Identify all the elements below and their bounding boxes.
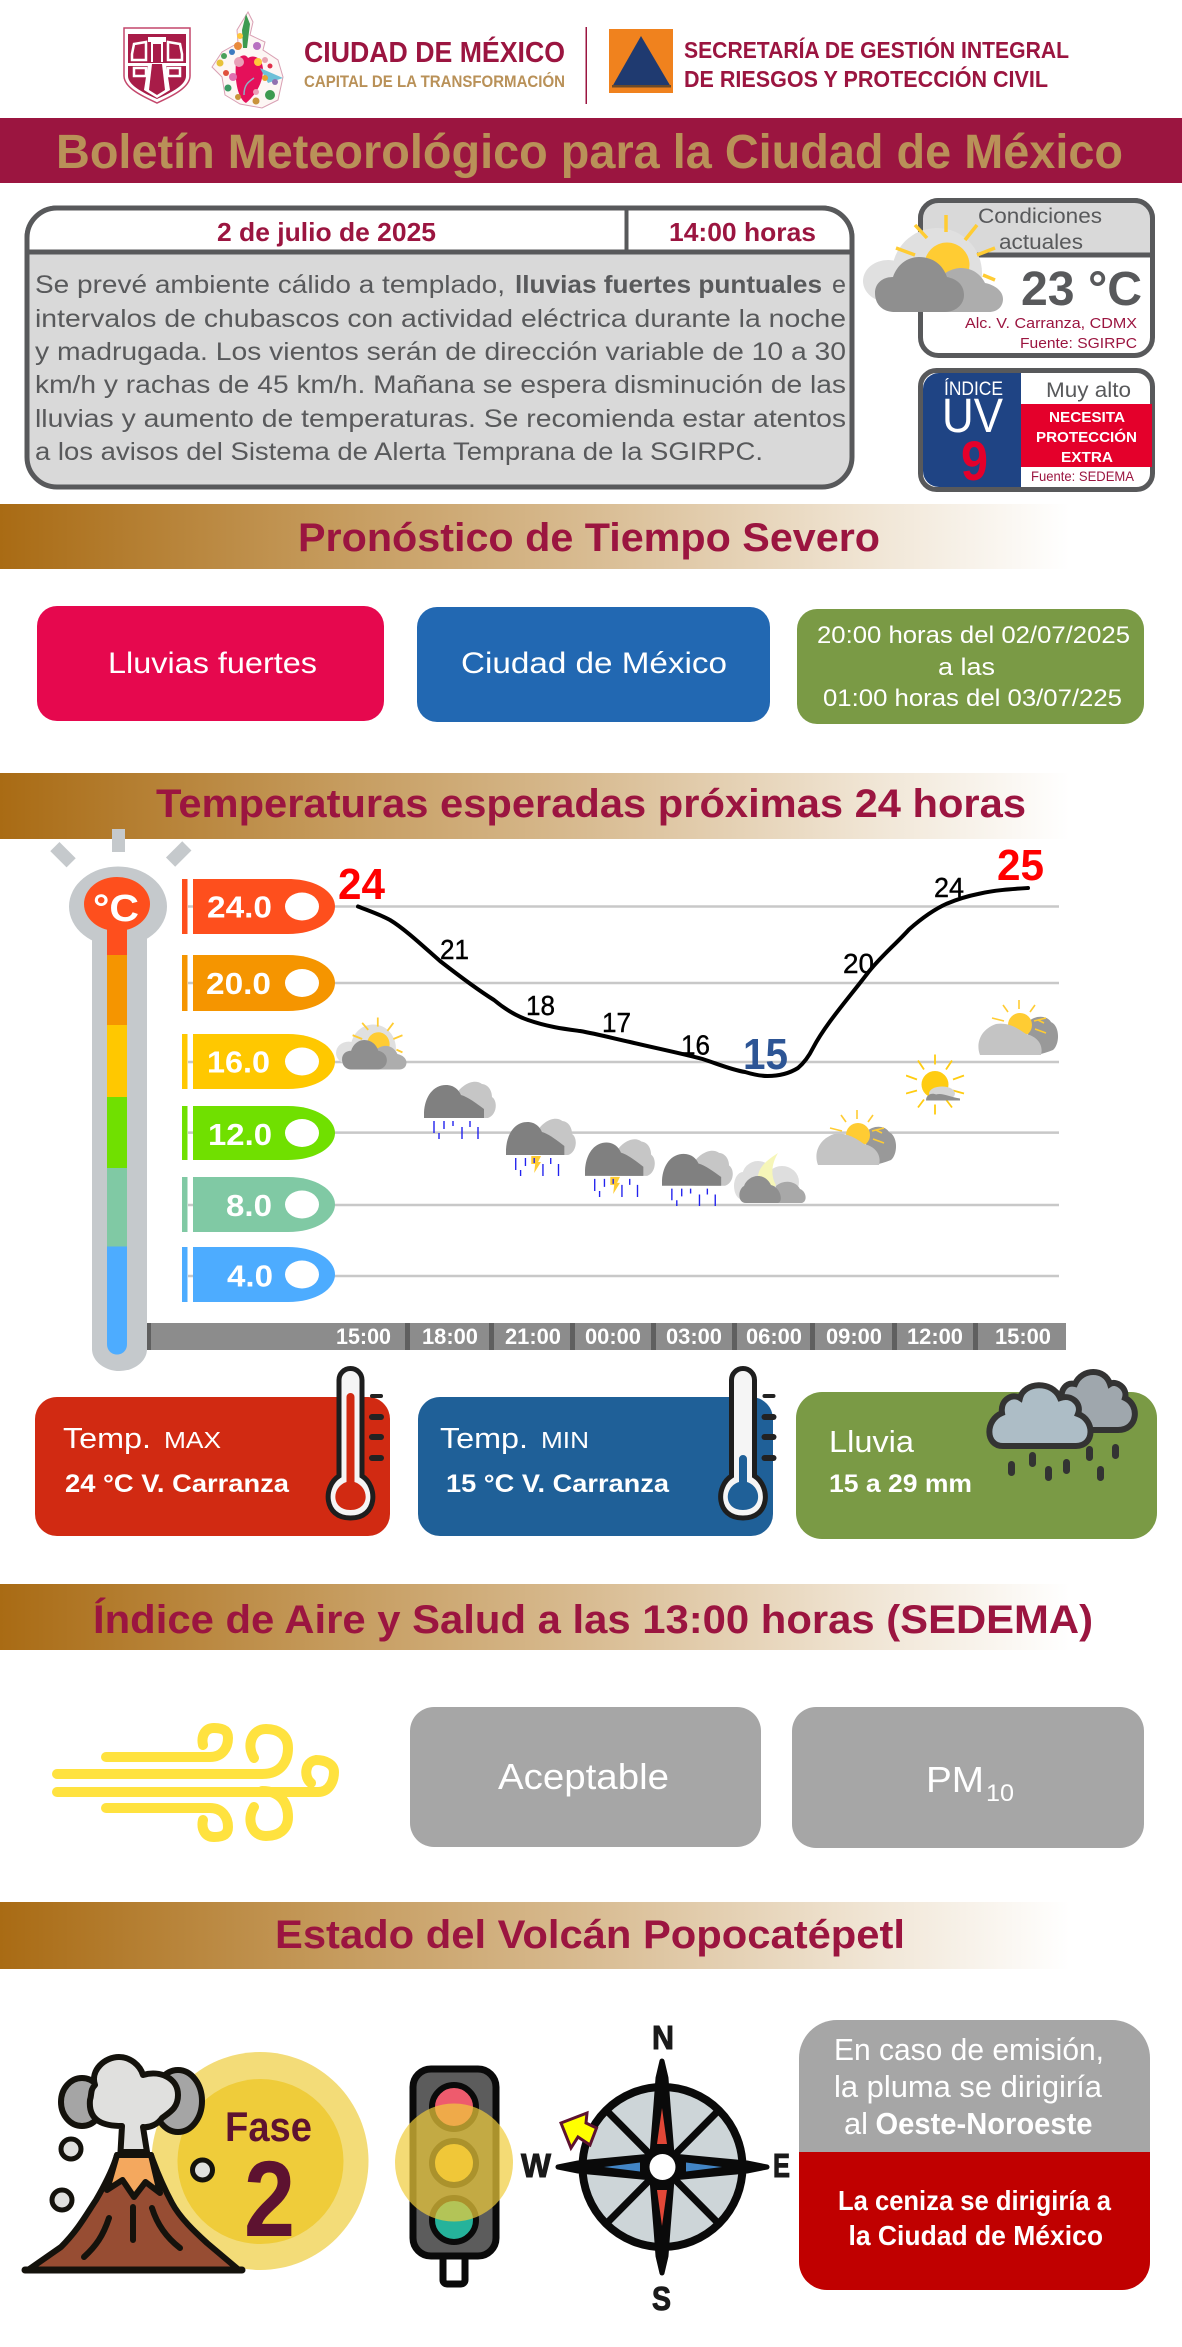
icon: compass: N <box>652 2019 674 2056</box>
time axis: 03:00 <box>666 1324 722 1349</box>
time axis: 15:00 <box>995 1324 1051 1349</box>
forecast paragraph: a los avisos del Sistema de Alerta Temprana de la SGIRPC. <box>35 438 763 466</box>
time axis: 15:00 <box>336 1324 391 1349</box>
card: minimum temperature: 15 °C V. Carranza <box>446 1470 670 1498</box>
panel: UV index: ÍNDICE <box>944 379 1003 400</box>
icon: hot thermometer <box>328 1368 384 1518</box>
heading: temperatures: Temperaturas esperadas próximas 24 horas <box>156 782 1026 826</box>
panel: current conditions: actuales <box>999 231 1083 254</box>
panel: ash plume: la pluma se dirigiría <box>834 2069 1103 2104</box>
card: validity period: a las <box>938 654 995 681</box>
legend pill 24: 24.0 <box>207 890 272 925</box>
forecast paragraph: intervalos de chubascos con actividad eléctrica durante la noche <box>35 305 846 333</box>
forecast paragraph: y madrugada. Los vientos serán de dirección variable de 10 a 30 <box>35 338 846 366</box>
logo text: Secretaría: SECRETARÍA DE GESTIÓN INTEGRAL <box>684 36 1069 63</box>
extra protection label <box>1021 404 1152 467</box>
card: minimum temperature: Temp. <box>440 1423 528 1455</box>
card: maximum temperature <box>35 1368 390 1536</box>
heading: severe weather <box>0 504 1070 569</box>
time axis <box>147 1323 1066 1350</box>
forecast paragraph: Se prevé ambiente cálido a templado, <box>35 271 505 299</box>
card: maximum temperature: MAX <box>164 1427 221 1453</box>
forecast paragraph <box>35 271 846 466</box>
legend pill 8 <box>182 1177 335 1232</box>
temperature curve <box>358 888 1028 1076</box>
legend pill 16 <box>182 1034 335 1089</box>
card: validity period: 20:00 horas del 02/07/2025 <box>817 622 1130 649</box>
icon: compass: S <box>652 2280 671 2317</box>
panel: ash plume <box>799 2020 1150 2290</box>
logo: shield <box>124 28 190 103</box>
heading: air quality <box>0 1584 1093 1650</box>
card: maximum temperature: 24 °C V. Carranza <box>65 1470 290 1498</box>
weather icons along the chart <box>336 1000 1058 1206</box>
panel: current conditions: 23 °C <box>1021 263 1142 316</box>
time axis: 12:00 <box>907 1324 963 1349</box>
forecast paragraph: lluvias y aumento de temperaturas. Se recomienda estar atentos <box>35 405 846 433</box>
logo text: Ciudad de México: CAPITAL DE LA TRANSFORMACIÓN <box>304 72 565 91</box>
panel: ash plume: La ceniza se dirigiría a <box>838 2185 1111 2216</box>
curve labels: 18 <box>526 990 555 1021</box>
icon: storm 21:00 <box>506 1119 576 1176</box>
heading: air quality: Índice de Aire y Salud a las 13:00 horas (SEDEMA) <box>93 1597 1093 1642</box>
curve labels: 17 <box>602 1007 631 1038</box>
logo text: Secretaría <box>684 36 1069 92</box>
icon: rain clouds <box>989 1372 1135 1481</box>
thermometer scale: °C <box>93 888 139 930</box>
extra protection label: EXTRA <box>1061 449 1113 466</box>
icon: storm 00:00 <box>585 1139 655 1197</box>
panel: UV index <box>920 370 1152 492</box>
panel: ash plume: Oeste-Noroeste <box>876 2106 1092 2141</box>
icon: sunny 12:00 <box>906 1054 964 1114</box>
panel: current conditions: Fuente: SGIRPC <box>1020 335 1137 352</box>
card: pollutant <box>792 1707 1144 1848</box>
curve labels: 24 <box>338 860 385 909</box>
legend pill 24 <box>182 879 335 934</box>
icon: sun and clouds 09:00 <box>816 1110 896 1165</box>
panel: current conditions <box>863 200 1152 356</box>
curve labels: 25 <box>997 841 1044 890</box>
icon: compass: W <box>521 2147 552 2184</box>
forecast paragraph: lluvias fuertes puntuales <box>515 271 822 299</box>
icon: partly cloudy 15:00 <box>336 1018 406 1073</box>
curve labels: 15 <box>743 1030 788 1079</box>
legend pill 20: 20.0 <box>206 966 271 1001</box>
legend pill 4: 4.0 <box>227 1258 273 1294</box>
thermometer scale <box>50 829 191 1371</box>
panel: UV index: Fuente: SEDEMA <box>1031 468 1135 484</box>
time axis: 21:00 <box>505 1324 561 1349</box>
time axis: 00:00 <box>585 1324 641 1349</box>
curve labels: 21 <box>440 934 469 965</box>
card: maximum temperature: Temp. <box>63 1423 151 1455</box>
panel: UV index: Muy alto <box>1046 379 1131 402</box>
legend pill 8: 8.0 <box>226 1188 272 1223</box>
time axis: 06:00 <box>746 1324 802 1349</box>
panel: ash plume: al <box>844 2106 868 2141</box>
panel: current conditions: Condiciones <box>978 205 1102 228</box>
time axis: 18:00 <box>422 1324 478 1349</box>
logo text: Ciudad de México: CIUDAD DE MÉXICO <box>304 35 565 69</box>
legend pill 12: 12.0 <box>208 1117 272 1152</box>
card: air quality level <box>410 1707 761 1847</box>
card: minimum temperature: MIN <box>541 1427 589 1453</box>
card: heavy rain <box>37 606 384 721</box>
time axis: 09:00 <box>826 1324 882 1349</box>
panel: ash plume: En caso de emisión, <box>834 2032 1104 2067</box>
icon: cold thermometer <box>721 1368 776 1518</box>
grid lines <box>188 906 1059 1276</box>
card: validity period <box>797 609 1144 724</box>
logo text: Ciudad de México <box>304 35 565 91</box>
panel: bulletin text <box>27 208 852 487</box>
header logos <box>124 12 1069 108</box>
icon: partly cloudy <box>863 215 1003 318</box>
icon: traffic light <box>395 2069 513 2284</box>
icon: compass <box>521 2019 790 2317</box>
card: heavy rain: Lluvias fuertes <box>108 647 317 680</box>
card: pollutant: PM <box>926 1759 984 1800</box>
legend pill 16: 16.0 <box>207 1045 270 1080</box>
card: air quality level: Aceptable <box>498 1756 669 1797</box>
curve labels <box>338 841 1044 1079</box>
badge: volcanic phase: 2 <box>244 2138 295 2259</box>
card: minimum temperature <box>418 1368 776 1536</box>
forecast paragraph: e <box>832 271 846 299</box>
card: rainfall: Lluvia <box>829 1424 915 1459</box>
title banner: Boletín Meteorológico para la Ciudad de México <box>56 126 1123 179</box>
icon: wind <box>57 1728 334 1837</box>
legend pill 4 <box>182 1247 335 1302</box>
curve labels: 16 <box>681 1030 710 1060</box>
logo text: Secretaría: DE RIESGOS Y PROTECCIÓN CIVIL <box>684 65 1048 92</box>
icon: volcano <box>25 2057 242 2270</box>
card: location <box>417 607 770 722</box>
extra protection label: NECESITA <box>1049 409 1125 426</box>
legend pill 12 <box>182 1106 335 1160</box>
extra protection label: PROTECCIÓN <box>1036 428 1137 446</box>
curve labels: 24 <box>934 872 964 903</box>
curve labels: 20 <box>843 948 874 979</box>
icon: rain 03:00 <box>662 1151 733 1206</box>
badge: volcanic phase <box>152 2052 368 2270</box>
card: validity period: 01:00 horas del 03/07/225 <box>823 685 1122 712</box>
icon: cloudy night 06:00 <box>734 1153 806 1203</box>
panel: current conditions: Alc. V. Carranza, CDMX <box>965 315 1137 332</box>
card: pollutant: 10 <box>986 1780 1014 1807</box>
badge: volcanic phase: Fase <box>225 2103 312 2150</box>
icon: rain 18:00 <box>424 1082 496 1139</box>
legend pill 20 <box>182 955 335 1011</box>
icon: sun and clouds 15:00 <box>978 1000 1058 1055</box>
active light halo <box>395 2104 513 2222</box>
panel: UV index: UV <box>942 390 1003 443</box>
logo: civil protection <box>609 29 673 93</box>
heading: volcano: Estado del Volcán Popocatépetl <box>275 1913 905 1957</box>
icon: compass: E <box>773 2147 790 2184</box>
panel: UV index: 9 <box>961 429 988 492</box>
time: 14:00 horas <box>669 217 816 247</box>
panel: ash plume: la Ciudad de México <box>848 2220 1103 2251</box>
heading: severe weather: Pronóstico de Tiempo Severo <box>298 516 880 560</box>
forecast paragraph: km/h y rachas de 45 km/h. Mañana se espera disminución de las <box>35 371 846 399</box>
card: location: Ciudad de México <box>461 647 727 680</box>
arrow: plume direction <box>561 2113 596 2148</box>
logo: map of the city <box>212 12 283 108</box>
card: rainfall <box>796 1372 1157 1539</box>
heading: temperatures <box>0 773 1070 839</box>
date: 2 de julio de 2025 <box>217 217 436 247</box>
card: rainfall: 15 a 29 mm <box>829 1470 972 1498</box>
heading: volcano <box>0 1902 1070 1969</box>
